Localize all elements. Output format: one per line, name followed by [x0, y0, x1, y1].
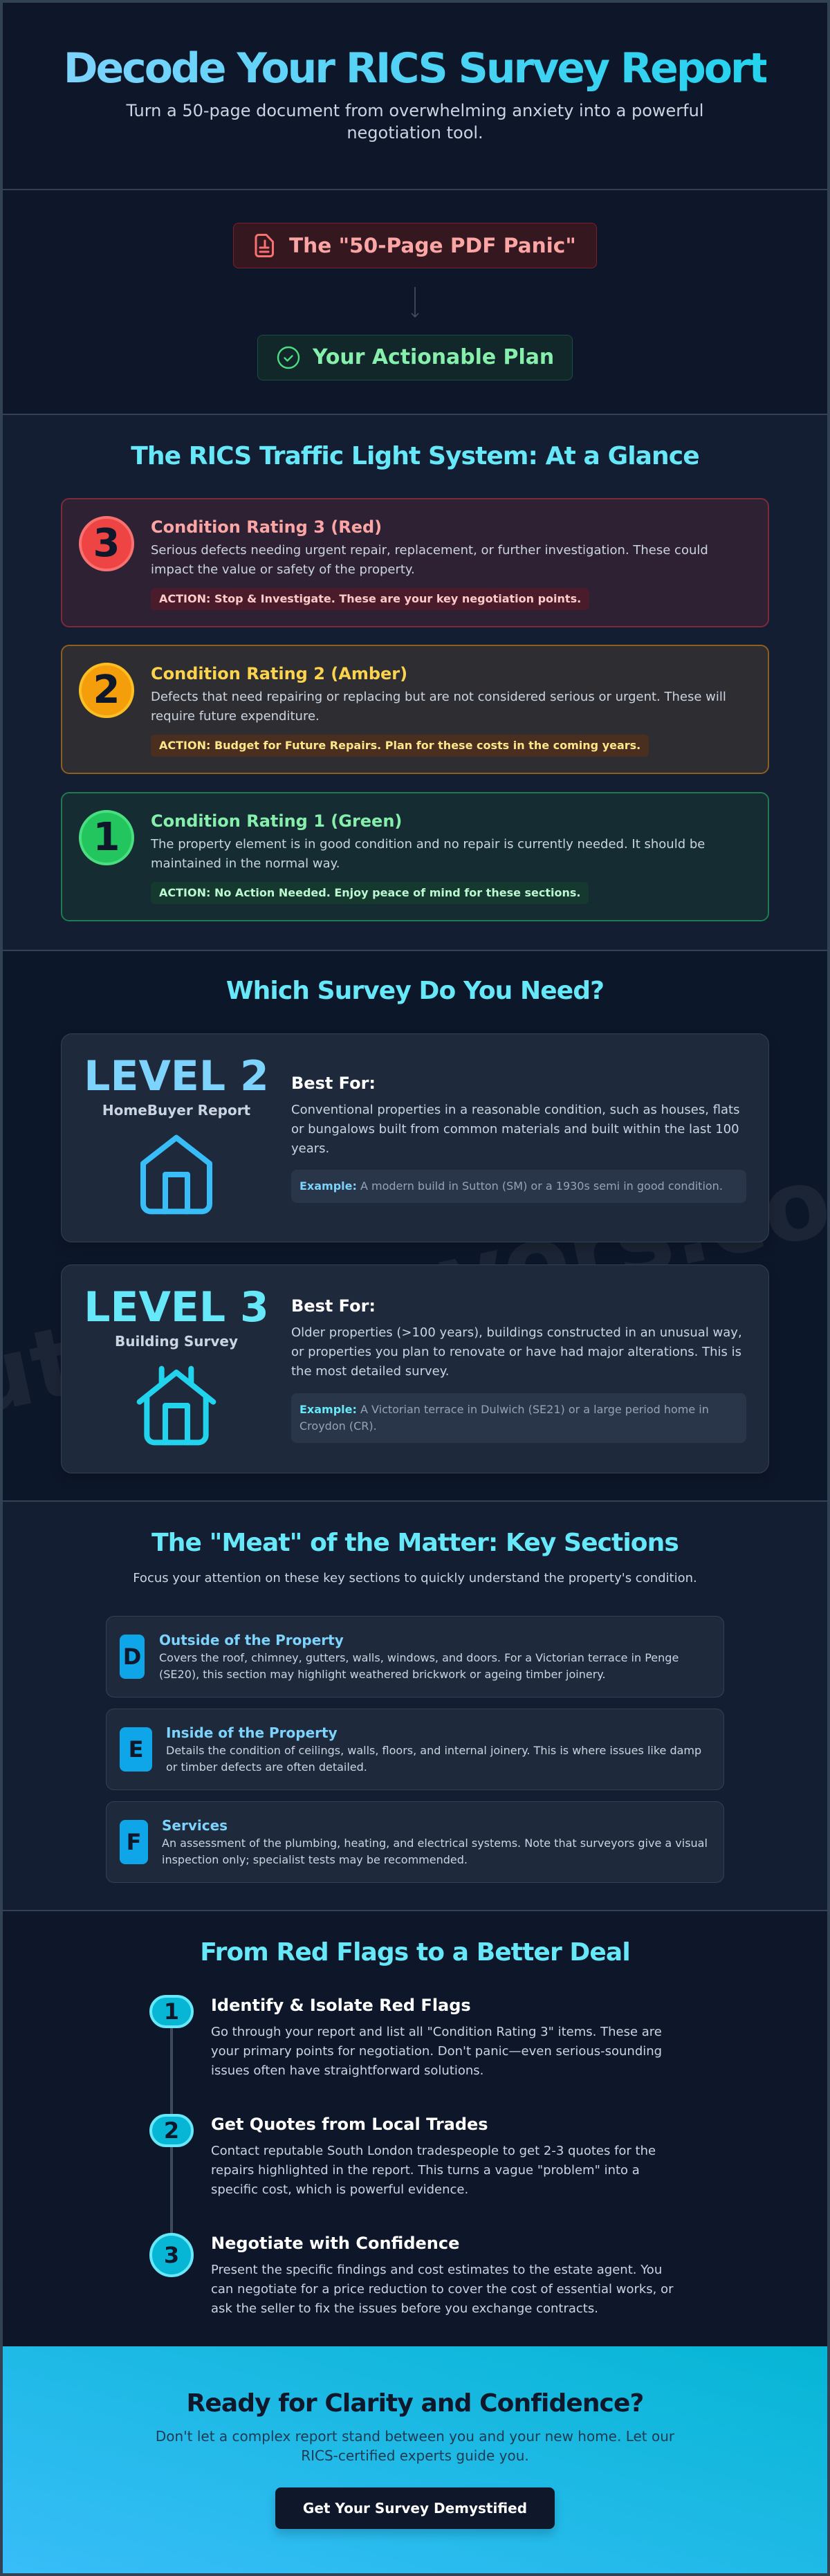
rating 1 text: maintained in the normal way.	[151, 856, 340, 871]
section E text: or timber defects are often detailed.	[166, 1760, 367, 1774]
level 2 text	[291, 1103, 740, 1156]
panel: panic to plan	[0, 190, 830, 415]
step 2 text	[211, 2144, 656, 2197]
level 3 text	[291, 1325, 742, 1379]
section F text	[162, 1837, 708, 1866]
section E text	[166, 1744, 701, 1774]
level 2 name: LEVEL 2	[84, 1052, 269, 1101]
rating 3 text: Serious defects needing urgent repair, replacement, or further investigation. These could	[151, 543, 708, 558]
level 3 text: Older properties (>100 years), buildings constructed in an unusual way,	[291, 1325, 742, 1340]
section F text: An assessment of the plumbing, heating, and electrical systems. Note that surveyors give a visual	[162, 1837, 708, 1850]
level 2 heading: Best For:	[291, 1074, 376, 1093]
level 3 name: LEVEL 3	[84, 1283, 269, 1332]
level 2 text: years.	[291, 1141, 329, 1156]
level 3 heading: Best For:	[291, 1296, 376, 1316]
panel: call to action	[0, 2346, 830, 2576]
level 3 example: Example: A Victorian terrace in Dulwich (SE21) or a large period home in	[299, 1403, 709, 1416]
section E title: Inside of the Property	[166, 1724, 338, 1741]
step 2 text: repairs highlighted in the report. This turns a vague "problem" into a	[211, 2163, 640, 2178]
card: rating 1	[61, 792, 769, 921]
heading: which survey: Which Survey Do You Need?	[226, 977, 604, 1005]
subtitle: Turn a 50-page document from overwhelming anxiety into a powerful	[126, 101, 703, 120]
step 2 number: 2	[164, 2117, 179, 2144]
section E	[106, 1709, 724, 1790]
subtitle: negotiation tool.	[347, 123, 483, 142]
step 3 text: can negotiate for a price reduction to cover the cost of essential works, or	[211, 2282, 674, 2297]
rating 3 text	[151, 543, 708, 577]
icon: house with chimneys	[137, 1365, 216, 1446]
level 3 text: or properties you plan to renovate or have had major alterations. This is	[291, 1345, 741, 1359]
step 1 number: 1	[164, 1998, 179, 2025]
CTA button	[275, 2487, 555, 2529]
panel: which survey	[0, 951, 830, 1502]
badge F	[120, 1820, 148, 1864]
rating 3 title: Condition Rating 3 (Red)	[151, 517, 382, 537]
CTA text: RICS-certified experts guide you.	[301, 2447, 529, 2464]
card: rating 2	[61, 645, 769, 774]
step 1 text: your primary points for negotiation. Don't panic—even serious-sounding	[211, 2044, 662, 2059]
badge 3	[79, 516, 134, 571]
badge 2: 2	[93, 668, 120, 712]
callout: 50-page PDF panic	[233, 223, 597, 268]
title: Decode Your RICS Survey Report	[64, 44, 766, 93]
step 1 number	[149, 1995, 194, 2028]
icon: file	[255, 234, 274, 257]
heading: key sections: The "Meat" of the Matter: Key Sections	[151, 1529, 679, 1557]
step 3 text	[211, 2263, 674, 2316]
badge E: E	[129, 1736, 143, 1763]
level 3 example: Croydon (CR).	[299, 1419, 377, 1433]
level 2 text: or bungalows built from common materials and built within the last 100	[291, 1122, 739, 1137]
rating 2 text: require future expenditure.	[151, 709, 320, 724]
connector line	[170, 2027, 173, 2234]
arrow	[411, 287, 419, 318]
step 3 title: Negotiate with Confidence	[211, 2234, 459, 2253]
key sections intro: Focus your attention on these key sections to quickly understand the property's condition.	[133, 1571, 697, 1585]
rating 1 text: The property element is in good condition and no repair is currently needed. It should be	[151, 837, 705, 852]
badge E	[120, 1727, 152, 1772]
panel: traffic light system	[0, 415, 830, 951]
step 1 text	[211, 2025, 662, 2078]
step 2 text: Contact reputable South London tradespeople to get 2-3 quotes for the	[211, 2144, 656, 2158]
badge 2	[79, 663, 134, 718]
step 3 text: Present the specific findings and cost estimates to the estate agent. You	[211, 2263, 662, 2277]
heading: negotiation: From Red Flags to a Better Deal	[200, 1938, 630, 1967]
panel: key sections	[0, 1502, 830, 1911]
section F title: Services	[162, 1817, 228, 1834]
rating 1 action: ACTION: No Action Needed. Enjoy peace of mind for these sections.	[159, 886, 580, 899]
section D text: Covers the roof, chimney, gutters, walls, windows, and doors. For a Victorian terrace in Penge	[159, 1651, 679, 1664]
section D title: Outside of the Property	[159, 1632, 344, 1648]
badge 1: 1	[93, 815, 120, 860]
card: level 2	[61, 1033, 769, 1244]
step 2 number	[149, 2114, 194, 2147]
panel: hero	[0, 0, 830, 190]
card: rating 3	[61, 498, 769, 627]
section E text: Details the condition of ceilings, walls, floors, and internal joinery. This is where issues like damp	[166, 1744, 701, 1757]
section F text: inspection only; specialist tests may be recommended.	[162, 1853, 468, 1866]
step 1 text: Go through your report and list all "Condition Rating 3" items. These are	[211, 2025, 662, 2039]
callout: actionable plan	[257, 335, 573, 380]
step 3 number	[149, 2233, 194, 2277]
section D	[106, 1616, 724, 1698]
step 1 text: issues often have straightforward solutions.	[211, 2063, 483, 2078]
badge D: D	[123, 1644, 141, 1670]
badge 3: 3	[93, 521, 120, 566]
badge 1	[79, 810, 134, 865]
rating 2 action	[151, 735, 649, 757]
CTA text	[156, 2428, 675, 2464]
CTA heading: Ready for Clarity and Confidence?	[187, 2389, 643, 2418]
section F	[106, 1801, 724, 1883]
rating 3 text: impact the value or safety of the property.	[151, 562, 415, 577]
rating 3 action	[151, 588, 589, 610]
level 2 example: Example: A modern build in Sutton (SM) or a 1930s semi in good condition.	[299, 1179, 723, 1193]
CTA button: Get Your Survey Demystified	[303, 2500, 527, 2517]
rating 3 action: ACTION: Stop & Investigate. These are your key negotiation points.	[159, 592, 581, 605]
level 3 subtitle: Building Survey	[115, 1333, 238, 1350]
callout label: Your Actionable Plan	[313, 345, 554, 369]
badge D	[120, 1635, 145, 1679]
badge F: F	[127, 1829, 141, 1855]
step 1 title: Identify & Isolate Red Flags	[211, 1996, 471, 2015]
rating 2 text: Defects that need repairing or replacing but are not considered serious or urgent. These will	[151, 690, 726, 704]
rating 1 action	[151, 882, 589, 904]
step 2 title: Get Quotes from Local Trades	[211, 2115, 488, 2134]
icon: check circle	[277, 346, 300, 369]
rating 2 title: Condition Rating 2 (Amber)	[151, 664, 407, 683]
step 3 number: 3	[164, 2242, 179, 2268]
section D text: (SE20), this section may highlight weathered brickwork or ageing timber joinery.	[159, 1668, 606, 1681]
rating 1 title: Condition Rating 1 (Green)	[151, 811, 402, 831]
level 3 example	[291, 1393, 746, 1443]
subtitle	[126, 101, 703, 142]
icon: house	[140, 1134, 212, 1215]
rating 1 text	[151, 837, 705, 871]
panel: negotiation steps	[0, 1911, 830, 2346]
step 2 text: specific cost, which is powerful evidence.	[211, 2182, 468, 2197]
rating 2 text	[151, 690, 726, 724]
CTA text: Don't let a complex report stand between you and your new home. Let our	[156, 2428, 674, 2445]
level 3 text: the most detailed survey.	[291, 1364, 450, 1379]
level 2 text: Conventional properties in a reasonable condition, such as houses, flats	[291, 1103, 740, 1117]
heading: traffic light: The RICS Traffic Light System: At a Glance	[131, 442, 699, 470]
callout label: The "50-Page PDF Panic"	[289, 234, 576, 257]
section D text	[159, 1651, 679, 1681]
level 2 subtitle: HomeBuyer Report	[102, 1102, 250, 1119]
card: level 3	[61, 1264, 769, 1473]
level 2 example	[291, 1170, 746, 1203]
rating 2 action: ACTION: Budget for Future Repairs. Plan for these costs in the coming years.	[159, 739, 640, 752]
step 3 text: ask the seller to fix the issues before you exchange contracts.	[211, 2301, 598, 2316]
